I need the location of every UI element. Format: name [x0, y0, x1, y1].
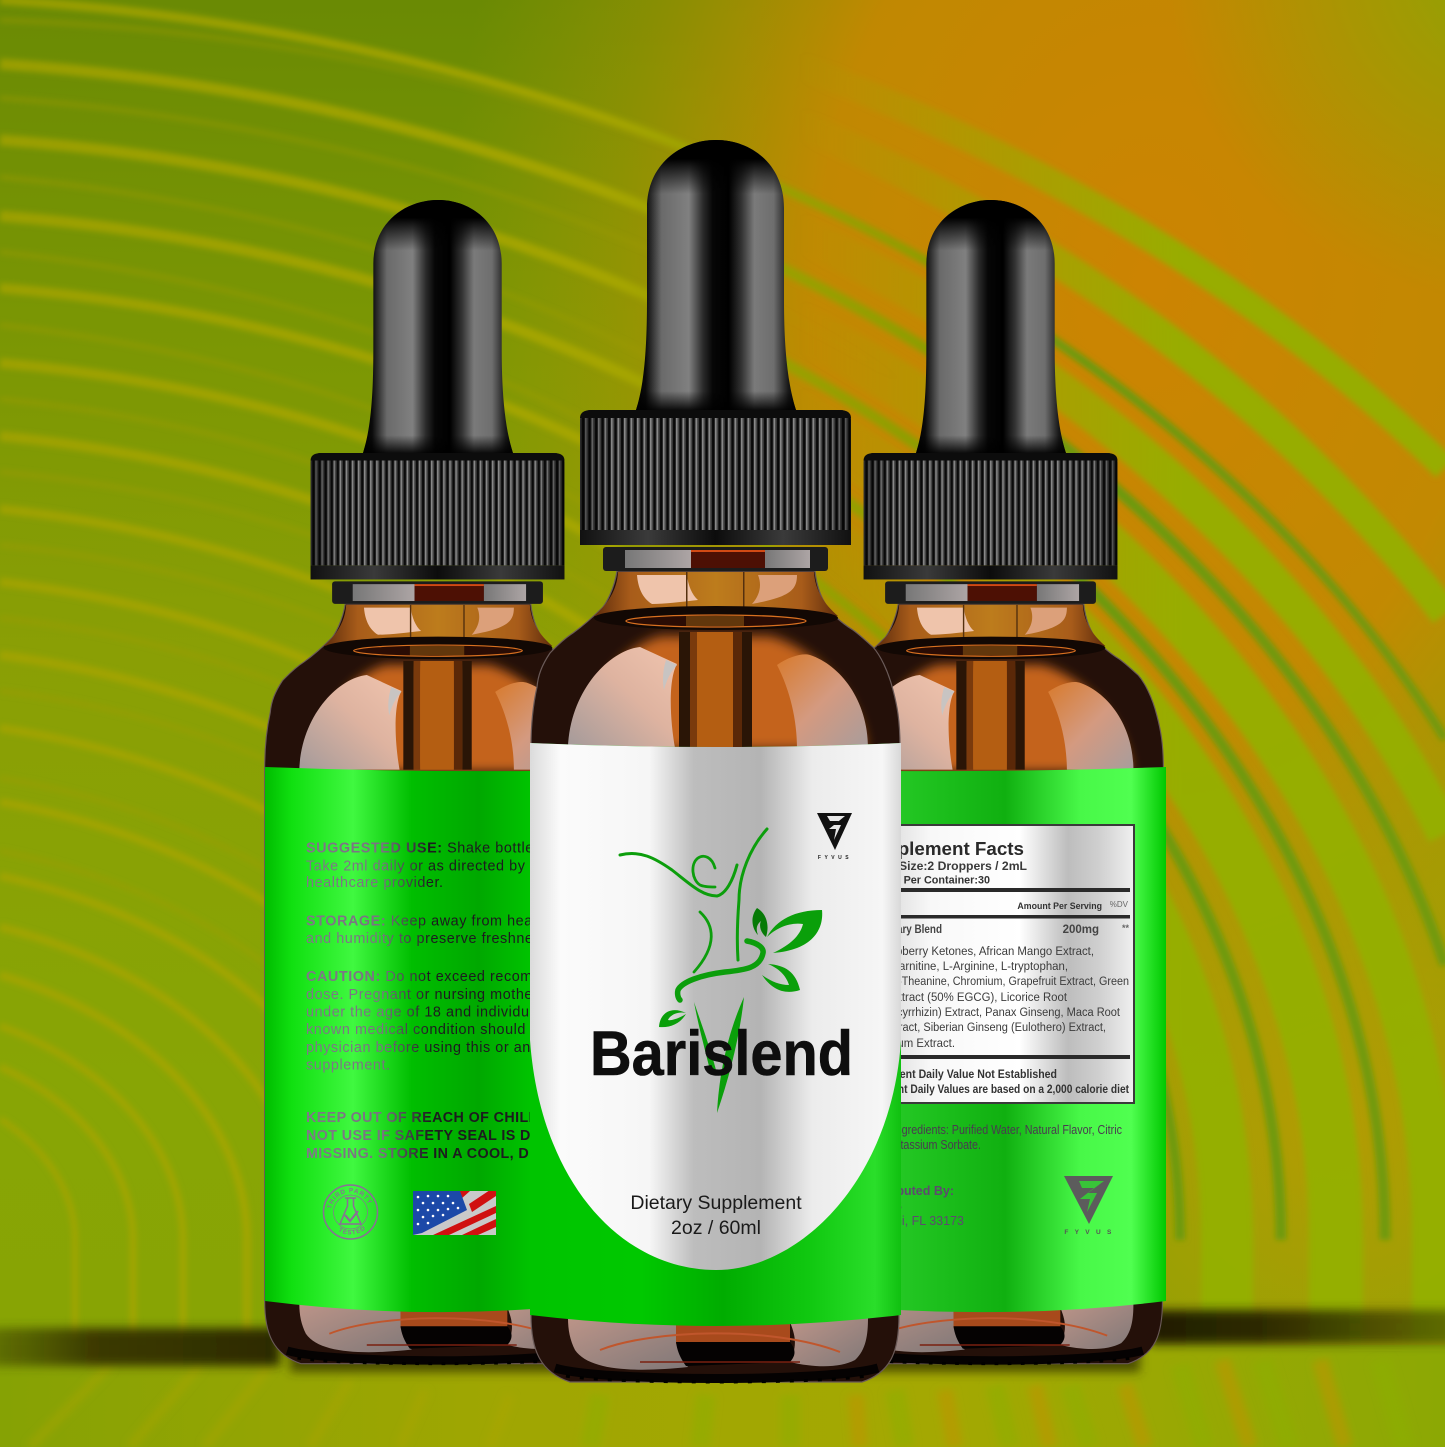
left label: usage directions: and humidity to preserve freshness. [306, 931, 554, 947]
left label: usage directions: supplement. [306, 1058, 391, 1074]
left label: usage directions: STORAGE: Keep away from heat [306, 914, 537, 930]
other ingredients text: Acid, Potassium Sorbate. [860, 1138, 981, 1152]
other ingredients text [860, 1123, 1122, 1152]
product descriptor: Dietary Supplement [630, 1192, 802, 1214]
left label: usage directions: SUGGESTED USE: Shake bottle well. [306, 840, 570, 856]
supplement facts panel: Supplement Facts [862, 838, 1024, 859]
left label: usage directions: under the age of 18 and individuals with [306, 1004, 582, 1020]
supplement facts panel: L-Carnitine, L-Arginine, L-tryptophan, [881, 960, 1068, 973]
other ingredients text: Other Ingredients: Purified Water, Natural Flavor, Citric [863, 1123, 1122, 1137]
supplement facts panel: ** Percent Daily Value Not Established [866, 1068, 1057, 1081]
left label: usage directions: MISSING. STORE IN A COOL, DRY PLACE. [306, 1146, 608, 1162]
icon: third party tested seal: TESTED [339, 1226, 364, 1234]
left label: usage directions: healthcare provider. [306, 875, 444, 891]
center green label [530, 743, 901, 1326]
icon: third party tested seal: THIRD PARTY [327, 1188, 372, 1208]
left label: usage directions: NOT USE IF SAFETY SEAL IS DAMAGED OR [306, 1128, 624, 1144]
left label: usage directions: dose. Pregnant or nursing mothers, [306, 987, 551, 1003]
supplement facts panel: Proprietary Blend [859, 923, 942, 936]
ground shadow [0, 1310, 1445, 1372]
left label: usage directions: physician before using this or any [306, 1040, 539, 1056]
center bottle: front label [530, 140, 901, 1382]
supplement facts panel: Serving Size:2 Droppers / 2mL [851, 859, 1028, 873]
icon: american flag [413, 1191, 496, 1235]
left label: usage directions: CAUTION: Do not exceed recommended [306, 969, 588, 985]
product descriptor: 2oz / 60ml [671, 1217, 761, 1239]
supplement facts panel: L-Theanine, Chromium, Grapefruit Extract, Green [892, 976, 1129, 988]
left label: usage directions [306, 840, 624, 1162]
right bottle green label [880, 767, 1166, 1312]
supplement facts panel [851, 825, 1134, 1103]
distributor text: Distributed By: [864, 1184, 954, 1198]
icon: third party tested seal [322, 1184, 378, 1240]
supplement facts panel: %DV [1110, 900, 1129, 909]
center silver oval label [530, 743, 901, 1270]
logo: green dancer with leaves [620, 829, 822, 1113]
supplement facts panel: 200mg [1063, 924, 1099, 936]
right bottle glass and dropper [818, 200, 1163, 1364]
supplement facts panel: Extract, Siberian Ginseng (Eulothero) Extract, [883, 1022, 1106, 1034]
supplement facts panel: † Percent Daily Values are based on a 2,000 calorie diet [862, 1083, 1129, 1096]
icon: fyvus logo [1064, 1176, 1118, 1236]
left bottle glass and dropper [265, 200, 610, 1364]
supplement facts panel: Raspberry Ketones, African Mango Extract, [876, 945, 1094, 958]
logo: fyvus brand mark [817, 813, 852, 861]
supplement facts panel: Amount Per Serving [1017, 901, 1102, 911]
product name: Barislend [590, 1019, 853, 1089]
supplement facts panel: Tea Extract (50% EGCG), Licorice Root [867, 991, 1068, 1004]
floor reflection [0, 1345, 1445, 1447]
left bottle: back label side [264, 200, 624, 1366]
distributor text [860, 1184, 964, 1228]
supplement facts panel: Servings Per Container:30 [855, 874, 990, 886]
left label: usage directions: known medical condition should consult [306, 1022, 580, 1038]
icon: fyvus logo: FYVUS [1064, 1229, 1118, 1236]
distributor text: Miami, FL 33173 [871, 1214, 964, 1228]
left label: usage directions: KEEP OUT OF REACH OF CHILDREN. DO [306, 1110, 602, 1126]
right bottle: supplement facts side [818, 200, 1166, 1364]
distributor text: FYVUS [860, 1199, 902, 1213]
supplement facts panel: Capsicum Extract. [863, 1037, 955, 1050]
left bottle green label [265, 767, 532, 1312]
logo: fyvus brand mark: FYVUS [818, 855, 852, 861]
supplement facts panel: (Glycyrrhizin) Extract, Panax Ginseng, Maca Root [877, 1007, 1121, 1019]
center bottle glass and dropper [531, 140, 900, 1382]
supplement facts panel: ** [1122, 923, 1129, 933]
left label: usage directions: Take 2ml daily or as directed by your [306, 858, 560, 874]
product descriptor [630, 1192, 802, 1239]
